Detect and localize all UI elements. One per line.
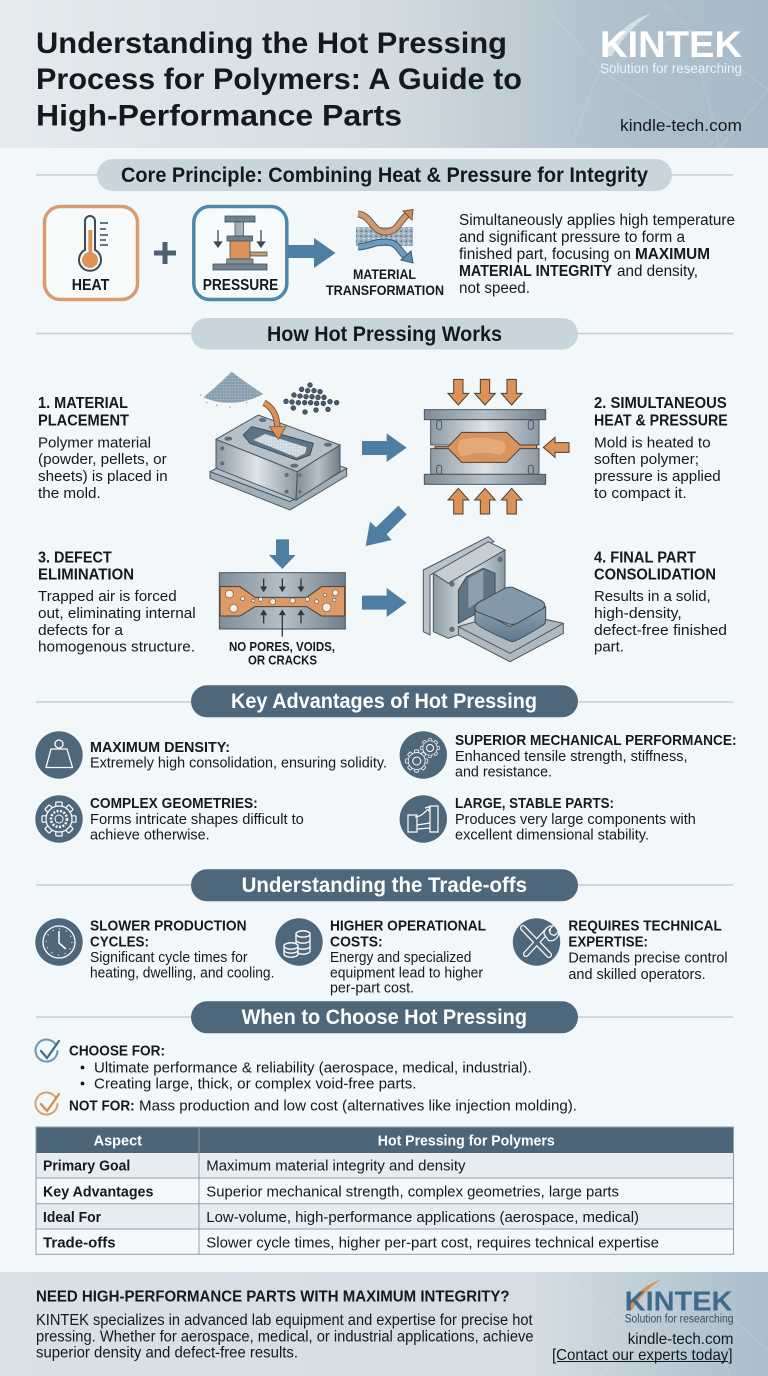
table row: primary goal: Maximum material integrity and density [206,1158,466,1175]
section heading: trade-offs [36,869,733,901]
text: step 2: 2. SIMULTANEOUS [594,395,727,412]
text: principle description: MAXIMUM [635,246,710,263]
text: maximum density: Extremely high consolidation, ensuring solidity. [90,754,387,772]
text: large, stable parts: Produces very large components with [455,811,696,828]
panel: core principle diagram [44,206,735,300]
table row: primary goal [43,1158,466,1175]
text: large, stable parts: excellent dimensional stability. [455,826,649,844]
panel: trade-offs [35,918,728,996]
text: maximum density [90,739,387,772]
section heading: core principle [36,159,733,191]
text: superior mechanical performance: Enhanced tensile strength, stiffness, [455,748,688,765]
text: large, stable parts: LARGE, STABLE PARTS: [455,795,614,812]
text: complex geometries: COMPLEX GEOMETRIES: [90,795,258,812]
text: step 3: ELIMINATION [38,567,134,584]
table header: Hot Pressing for Polymers [378,1132,555,1149]
section heading: how hot pressing works: How Hot Pressing Works [267,323,502,346]
title [36,27,522,132]
text: higher operational costs: per-part cost. [330,980,414,996]
icon: mold with powder and pellets [200,372,347,510]
text: step 3 [38,550,196,656]
text: requires technical expertise: EXPERTISE: [568,934,648,951]
arrow: step 2 to step 3 [366,506,407,546]
table row: trade-offs: Trade-offs [43,1234,116,1251]
logo: KINTEK colour: Solution for researching [625,1314,734,1326]
text: principle description: not speed. [459,280,530,297]
title: High-Performance Parts [36,100,402,132]
text: step 2: Mold is heated to [594,434,711,451]
text: step 2: to compact it. [594,485,687,502]
title: Process for Polymers: A Guide to [36,63,522,96]
text: step 2: soften polymer; [594,451,699,468]
text: requires technical expertise [568,918,728,983]
text: complex geometries: Forms intricate shapes difficult to [90,811,304,828]
section heading: core principle: Core Principle: Combining Heat & Pressure for Integrity [121,164,648,187]
logo: KINTEK white: KINTEK [600,24,742,65]
table header: Aspect [94,1132,142,1149]
text: higher operational costs: HIGHER OPERATIONAL [330,918,486,935]
text: step 4: high-density, [594,605,682,622]
website and contact link: [Contact our experts today] [552,1347,732,1364]
text: slower production cycles [90,918,274,981]
text: choose for [69,1043,532,1093]
table header [94,1132,555,1149]
text: step 2: pressure is applied [594,468,721,485]
panel: when to choose [36,1040,577,1115]
text: step 1: the mold. [38,485,101,502]
text: slower production cycles: CYCLES: [90,934,149,951]
table row: key advantages: Superior mechanical strength, complex geometries, large parts [206,1184,619,1201]
text: principle description: MATERIAL INTEGRITY [459,263,613,280]
label: no pores, voids, or cracks: NO PORES, VOIDS, [229,640,335,654]
section heading: when to choose [36,1001,733,1033]
logo: KINTEK colour [625,1279,734,1326]
icon: heated mold under pressure [424,379,569,514]
text: choose for: Ultimate performance & reliability (aerospace, medical, industrial). [94,1059,532,1076]
comparison table [36,1127,734,1254]
section heading: key advantages [36,685,733,717]
icon: double gears [400,731,447,779]
text: step 3: defects for a [38,622,124,639]
text: step 2 [594,395,728,502]
text: not for: NOT FOR: [69,1098,135,1115]
text: choose for: Creating large, thick, or complex void-free parts. [94,1076,416,1093]
text: not for: Mass production and low cost (alternatives like injection molding). [139,1098,577,1115]
panel: key advantages [35,731,737,844]
website and contact link: kindle-tech.com [628,1331,734,1348]
text: step 3: Trapped air is forced [38,588,177,605]
text: superior mechanical performance [455,732,736,780]
text: higher operational costs: COSTS: [330,934,383,951]
text: principle description: Simultaneously applies high temperature [459,212,735,229]
icon: material transformation [356,210,413,263]
text: step 3: out, eliminating internal [38,605,196,622]
icon: wrench and screwdriver [513,918,560,966]
text: complex geometries [90,795,304,844]
logo: KINTEK colour: KINTEK [625,1286,733,1317]
section heading: trade-offs: Understanding the Trade-offs [242,874,527,897]
table row: key advantages: Key Advantages [43,1184,153,1201]
section heading: when to choose: When to Choose Hot Pressing [242,1006,527,1029]
footer body text: pressing. Whether for aerospace, medical, or industrial applications, achieve [36,1328,534,1345]
label: no pores, voids, or cracks [229,640,335,667]
text: higher operational costs: equipment lead to higher [330,964,483,981]
text: higher operational costs: Energy and specialized [330,949,471,966]
text: step 3: homogenous structure. [38,639,195,656]
label: material transformation: MATERIAL [353,266,416,282]
text: principle description: and density, [617,263,698,280]
website: kindle-tech.com [620,116,742,135]
label: material transformation: TRANSFORMATION [326,282,444,298]
text: step 4 [594,550,727,656]
table row: primary goal: Primary Goal [43,1158,130,1175]
text: step 4: part. [594,639,624,656]
text: step 4: CONSOLIDATION [594,567,716,584]
logo: KINTEK white: Solution for researching [600,60,742,76]
text: step 4: defect-free finished [594,622,727,639]
icon: clock [35,918,83,966]
text: superior mechanical performance: SUPERIOR MECHANICAL PERFORMANCE: [455,732,736,749]
header banner [0,0,768,148]
text: slower production cycles: Significant cycle times for [90,949,248,966]
text: step 2: HEAT & PRESSURE [594,413,728,430]
icon: orange check [36,1093,59,1115]
text: step 1 [38,395,168,502]
table row: ideal for: Low-volume, high-performance applications (aerospace, medical) [206,1209,639,1226]
footer heading: NEED HIGH-PERFORMANCE PARTS WITH MAXIMUM INTEGRITY? [36,1289,510,1306]
icon: heat box: HEAT [72,277,110,294]
icon: pressure box: PRESSURE [203,277,278,294]
text: superior mechanical performance: and resistance. [455,764,552,780]
text: large, stable parts [455,795,696,844]
text: step 1: Polymer material [38,434,151,451]
text: step 1: 1. MATERIAL [38,395,128,412]
label: material transformation [326,266,444,298]
arrow: step 1 to step 2 [362,433,407,462]
icon: blue check [36,1040,59,1062]
text: complex geometries: achieve otherwise. [90,826,210,844]
icon: weight [35,731,83,779]
footer body text: KINTEK specializes in advanced lab equipment and expertise for precise hot [36,1312,533,1329]
text: slower production cycles: SLOWER PRODUCTION [90,918,246,935]
text: step 4: Results in a solid, [594,588,711,605]
text: step 4: 4. FINAL PART [594,550,696,567]
arrow: to transformation [288,238,336,268]
text: slower production cycles: heating, dwelling, and cooling. [90,964,274,981]
table row: ideal for: Ideal For [43,1209,101,1226]
text: step 1: sheets) is placed in [38,468,168,485]
footer body text [36,1312,534,1361]
icon: gear [35,795,83,843]
text: principle description: finished part, focusing on [459,246,631,263]
icon: plus [154,242,176,264]
text: step 3: 3. DEFECT [38,550,112,567]
text: requires technical expertise: REQUIRES TECHNICAL [568,918,722,935]
icon: coins [275,918,323,966]
icon: pressure box [194,206,287,300]
title: Understanding the Hot Pressing [36,27,507,60]
logo: KINTEK white [600,13,742,76]
text: requires technical expertise: and skilled operators. [568,966,706,983]
icon: finished part and opened mold [423,537,563,662]
icon: heat box [44,206,138,300]
text: maximum density: MAXIMUM DENSITY: [90,739,230,756]
icon: defect elimination cross-section [219,539,345,637]
footer body text: superior density and defect-free results. [36,1344,298,1361]
section heading: key advantages: Key Advantages of Hot Pressing [231,690,537,713]
text: step 1: (powder, pellets, or [38,451,167,468]
text: choose for: CHOOSE FOR: [69,1043,165,1060]
website and contact link [552,1331,734,1364]
arrow: step 3 to step 4 [362,588,407,617]
table row: trade-offs: Slower cycle times, higher per-part cost, requires technical expertise [206,1234,659,1251]
section heading: how hot pressing works [36,318,733,350]
text: higher operational costs [330,918,486,996]
icon: large part beam [400,795,447,843]
text: principle description [459,212,735,297]
text: principle description: and significant pressure to form a [459,229,685,246]
illustration: process diagrams [200,372,569,667]
footer banner [0,1272,768,1376]
label: no pores, voids, or cracks: OR CRACKS [248,653,317,667]
text: step 1: PLACEMENT [38,413,129,430]
text: requires technical expertise: Demands precise control [568,950,728,967]
